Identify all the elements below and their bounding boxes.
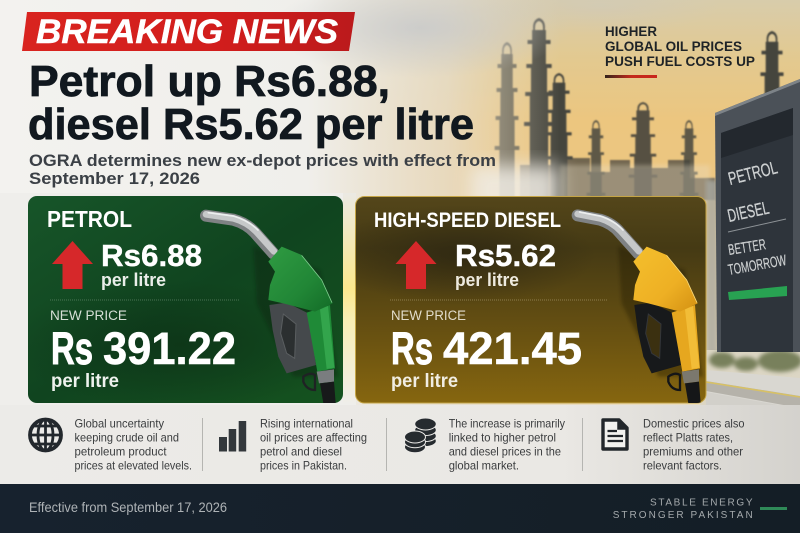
text: global uncertainty [74,416,192,472]
sign text: petrol: PETROL [726,157,779,189]
top-right caption: HIGHER [605,24,657,39]
sign green bar [728,286,787,300]
slogan [613,498,753,521]
petrol new price [50,308,236,392]
icon: bar chart [219,421,246,452]
petrol increase [101,238,202,290]
text: global uncertainty: keeping crude oil and [74,430,179,444]
petrol new price: Rs [51,323,93,374]
top-right caption [605,24,755,78]
icon: green fuel nozzle [206,213,338,403]
diesel new price: Rs [391,323,433,374]
text: rising prices: oil prices are affecting [260,430,367,444]
text: the increase: global market. [449,458,519,472]
text: rising prices: petrol and diesel [260,444,342,458]
icon: globe [30,419,61,451]
text: global uncertainty: petroleum product [74,444,167,458]
text: global uncertainty: Global uncertainty [74,416,164,430]
road and pavement [700,350,800,409]
icon: document [603,420,627,449]
icon: yellow fuel nozzle [578,212,703,403]
slogan: STRONGER PAKISTAN [613,510,753,521]
background scene: refinery at dusk [315,0,800,405]
diesel increase: per litre [455,269,519,290]
diesel new price: NEW PRICE [391,308,466,323]
petrol increase: per litre [101,269,166,290]
icon: coin stacks [404,418,436,453]
diesel increase: Rs5.62 [455,238,556,273]
slogan: STABLE ENERGY [650,498,753,508]
diesel new price: per litre [391,370,458,392]
panel: high-speed diesel [325,196,706,403]
text: the increase: The increase is primarily [449,416,565,430]
top-right caption: GLOBAL OIL PRICES [605,39,742,54]
text: domestic prices: Domestic prices also [643,416,745,430]
text: domestic prices: premiums and other [643,444,743,458]
sign text: better tomorrow: BETTER [727,236,767,259]
text: rising prices: Rising international [260,416,353,430]
refinery towers [494,17,784,200]
subtitle: September 17, 2026 [29,169,200,188]
diesel label: HIGH-SPEED DIESEL [374,208,561,232]
sign text: better tomorrow [727,236,788,279]
text: the increase [449,416,565,472]
title [28,57,474,149]
diesel new price: 421.45 [443,323,582,374]
petrol label: PETROL [47,206,132,232]
title: Petrol up Rs6.88, [29,57,390,106]
text: rising prices [260,416,367,472]
panel: petrol [28,196,343,403]
footer [0,484,800,533]
breaking news banner: BREAKING NEWS [36,13,338,51]
text: global uncertainty: prices at elevated levels. [74,458,192,472]
text: domestic prices [643,416,745,472]
petrol new price: 391.22 [103,323,236,374]
icon: red up arrow [396,241,436,289]
slogan accent bar [760,507,787,510]
diesel increase [455,238,556,290]
text: domestic prices: reflect Platts rates, [643,430,733,444]
petrol new price: NEW PRICE [50,308,127,323]
text: domestic prices: relevant factors. [643,458,722,472]
text: rising prices: prices in Pakistan. [260,458,347,472]
info strip [0,405,800,484]
petrol increase: Rs6.88 [101,238,202,273]
petrol new price: per litre [51,370,119,392]
title: diesel Rs5.62 per litre [28,100,474,149]
text: the increase: linked to higher petrol [449,430,556,444]
diesel new price [391,308,582,392]
icon: red up arrow [52,241,93,289]
station sign [715,79,800,352]
subtitle: OGRA determines new ex-depot prices with effect from [29,151,496,170]
subtitle [29,151,496,188]
text: the increase: and diesel prices in the [449,444,561,458]
effective date: Effective from September 17, 2026 [29,499,227,515]
sign text: diesel: DIESEL [726,198,771,226]
top-right caption: PUSH FUEL COSTS UP [605,54,755,69]
